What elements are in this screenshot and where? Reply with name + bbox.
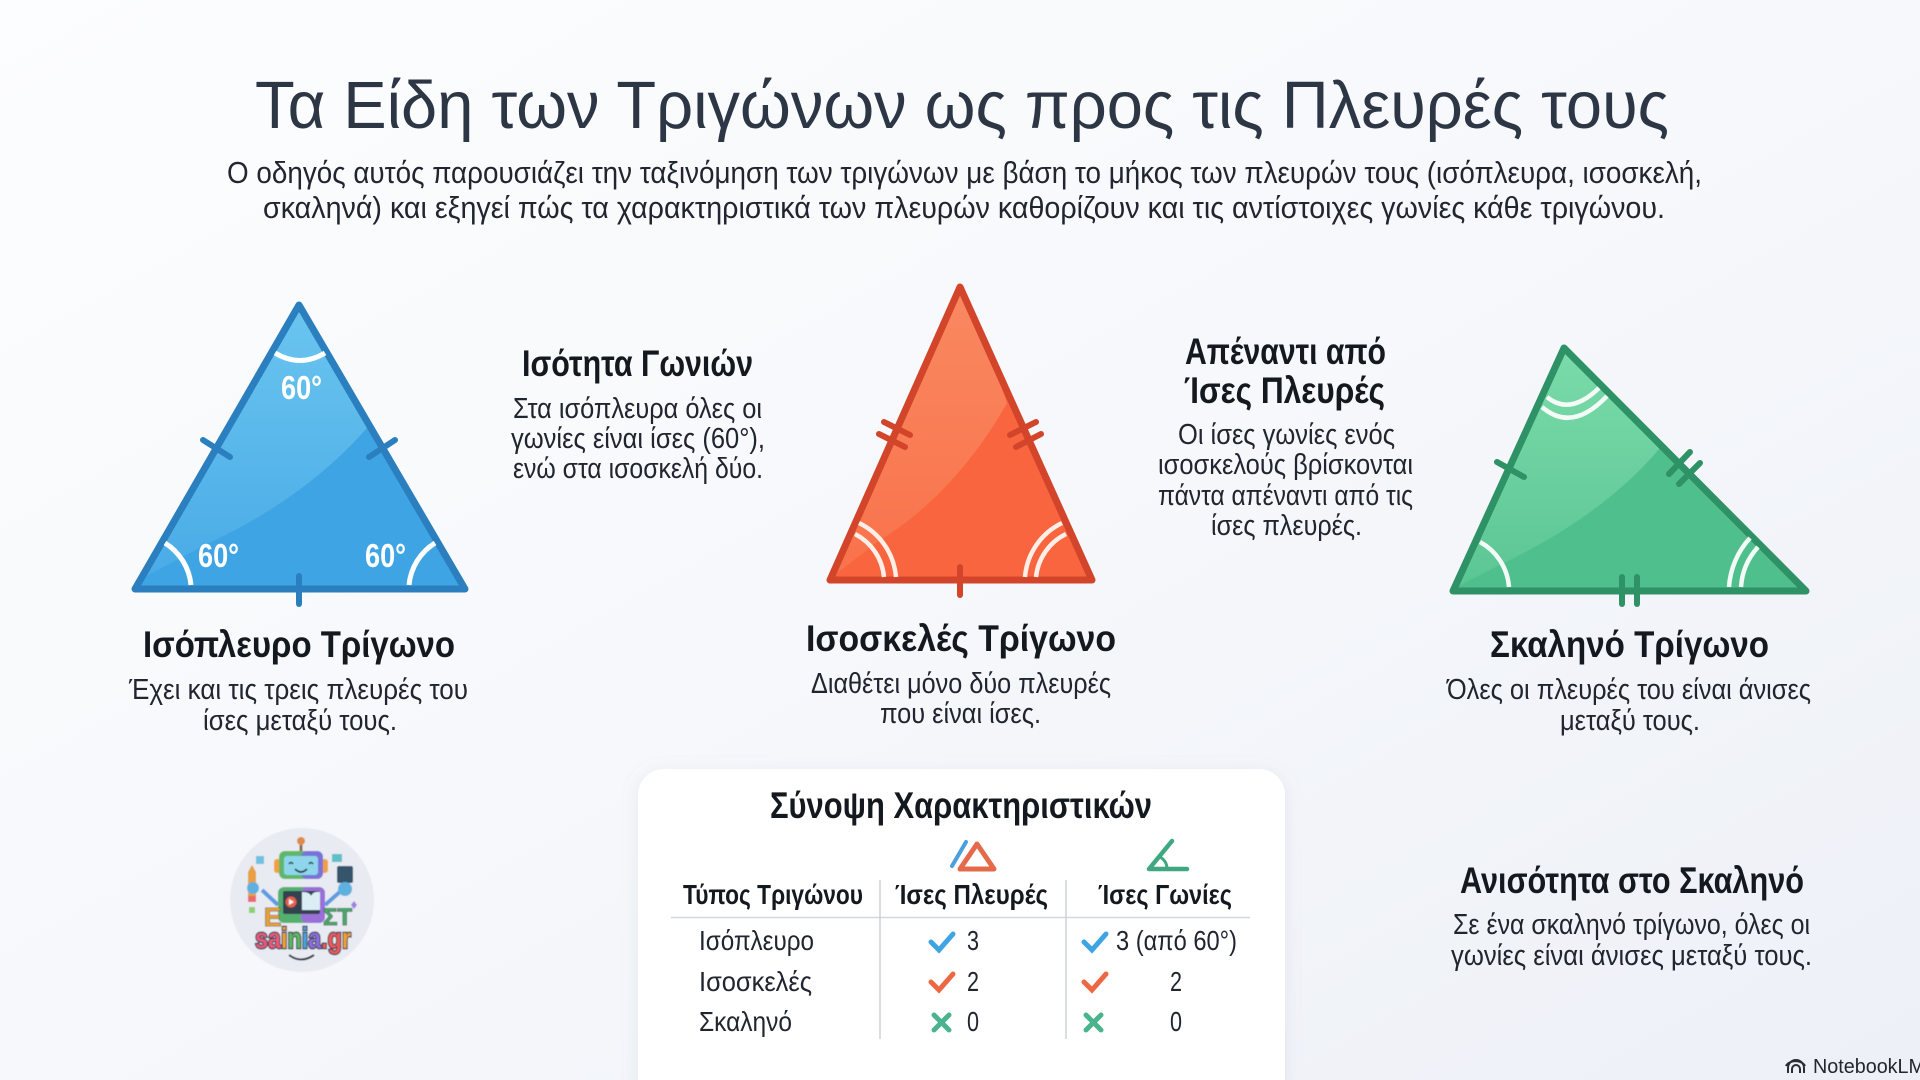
row: equilateral bbox=[699, 925, 1237, 956]
callout: opposite equal sides bbox=[1158, 331, 1413, 542]
label: isosceles: Διαθέτει μόνο δύο πλευρές bbox=[811, 668, 1111, 700]
callout: equality of angles: Ισότητα Γωνιών bbox=[522, 343, 753, 384]
icon: equal sides bbox=[952, 842, 994, 869]
callout: equality of angles: γωνίες είναι ίσες (60°), bbox=[511, 423, 765, 455]
label: isosceles bbox=[806, 618, 1116, 730]
row: scalene: Σκαληνό bbox=[699, 1006, 792, 1037]
callout: opposite equal sides: ίσες πλευρές. bbox=[1211, 510, 1362, 542]
row: isosceles: Ισοσκελές bbox=[699, 966, 812, 997]
icon: equilateral triangle bbox=[120, 290, 465, 604]
icon: equilateral triangle: 60° bbox=[281, 369, 322, 406]
label: isosceles: που είναι ίσες. bbox=[880, 698, 1041, 730]
row: isosceles: 2 bbox=[1170, 966, 1182, 997]
icon: sainia.gr robot logo: Ε bbox=[264, 902, 281, 932]
icon: isosceles triangle bbox=[815, 270, 1092, 595]
label: scalene bbox=[1446, 624, 1811, 737]
panel: summary table bbox=[638, 769, 1285, 1080]
row: equilateral: 3 bbox=[967, 925, 979, 956]
row: isosceles bbox=[699, 966, 1182, 997]
label: equilateral: Ισόπλευρο Τρίγωνο bbox=[143, 624, 455, 665]
row: isosceles: 2 bbox=[967, 966, 979, 997]
row: scalene bbox=[699, 1006, 1182, 1037]
icon: scalene triangle bbox=[1440, 335, 1806, 604]
row: scalene: 0 bbox=[967, 1006, 979, 1037]
row: scalene: 0 bbox=[1170, 1006, 1182, 1037]
label: equilateral: Έχει και τις τρεις πλευρές του bbox=[128, 674, 468, 706]
callout: equality of angles: Στα ισόπλευρα όλες οι bbox=[513, 393, 762, 425]
row: equilateral: 3 (από 60°) bbox=[1116, 925, 1237, 956]
callout: opposite equal sides: Οι ίσες γωνίες ενός bbox=[1178, 419, 1395, 451]
icon: equilateral triangle: 60° bbox=[365, 537, 406, 574]
icon: equal angles bbox=[1149, 841, 1187, 869]
label: scalene: Όλες οι πλευρές του είναι άνισες bbox=[1446, 674, 1811, 706]
icon: sainia.gr robot logo bbox=[230, 828, 374, 972]
label: isosceles: Ισοσκελές Τρίγωνο bbox=[806, 618, 1116, 659]
callout: equality of angles: ενώ στα ισοσκελή δύο. bbox=[513, 453, 763, 485]
label: scalene: μεταξύ τους. bbox=[1560, 705, 1700, 737]
label: equilateral: ίσες μεταξύ τους. bbox=[203, 705, 397, 737]
subtitle text: Ο οδηγός αυτός παρουσιάζει την ταξινόμηση των τριγώνων με βάση το μήκος των πλευρών τους (ισόπλευρα, ισοσκελή, bbox=[227, 155, 1702, 190]
title: Τα Είδη των Τριγώνων ως προς τις Πλευρές τους bbox=[255, 68, 1669, 143]
callout: opposite equal sides: πάντα απέναντι από τις bbox=[1158, 480, 1413, 512]
subtitle text bbox=[227, 155, 1702, 225]
icon: sainia.gr robot logo: sainia.gr bbox=[255, 923, 351, 955]
label: equilateral bbox=[128, 624, 468, 737]
callout: inequality in scalene: Σε ένα σκαληνό τρίγωνο, όλες οι bbox=[1453, 909, 1810, 941]
table header row: Τύπος Τριγώνου bbox=[683, 879, 863, 910]
callout: inequality in scalene bbox=[1451, 860, 1812, 972]
subtitle text: σκαληνά) και εξηγεί πώς τα χαρακτηριστικά των πλευρών καθορίζουν και τις αντίστοιχες γωνίες κάθε τριγώνου. bbox=[263, 190, 1665, 225]
icon: equilateral triangle: 60° bbox=[198, 537, 239, 574]
callout: equality of angles bbox=[511, 343, 765, 485]
callout: opposite equal sides: Ίσες Πλευρές bbox=[1184, 370, 1385, 411]
icon: sainia.gr robot logo: ΣΤ bbox=[323, 904, 352, 931]
label: scalene: Σκαληνό Τρίγωνο bbox=[1490, 624, 1769, 665]
table header row: Ίσες Γωνίες bbox=[1098, 879, 1232, 910]
callout: inequality in scalene: γωνίες είναι άνισες μεταξύ τους. bbox=[1451, 940, 1812, 972]
callout: opposite equal sides: Απέναντι από bbox=[1185, 331, 1386, 372]
callout: opposite equal sides: ισοσκελούς βρίσκονται bbox=[1158, 449, 1413, 481]
row: equilateral: Ισόπλευρο bbox=[699, 925, 814, 956]
callout: inequality in scalene: Ανισότητα στο Σκαληνό bbox=[1460, 860, 1804, 901]
table header row bbox=[683, 879, 1232, 910]
table header row: Ίσες Πλευρές bbox=[895, 879, 1048, 910]
table heading: Σύνοψη Χαρακτηριστικών bbox=[770, 785, 1152, 826]
